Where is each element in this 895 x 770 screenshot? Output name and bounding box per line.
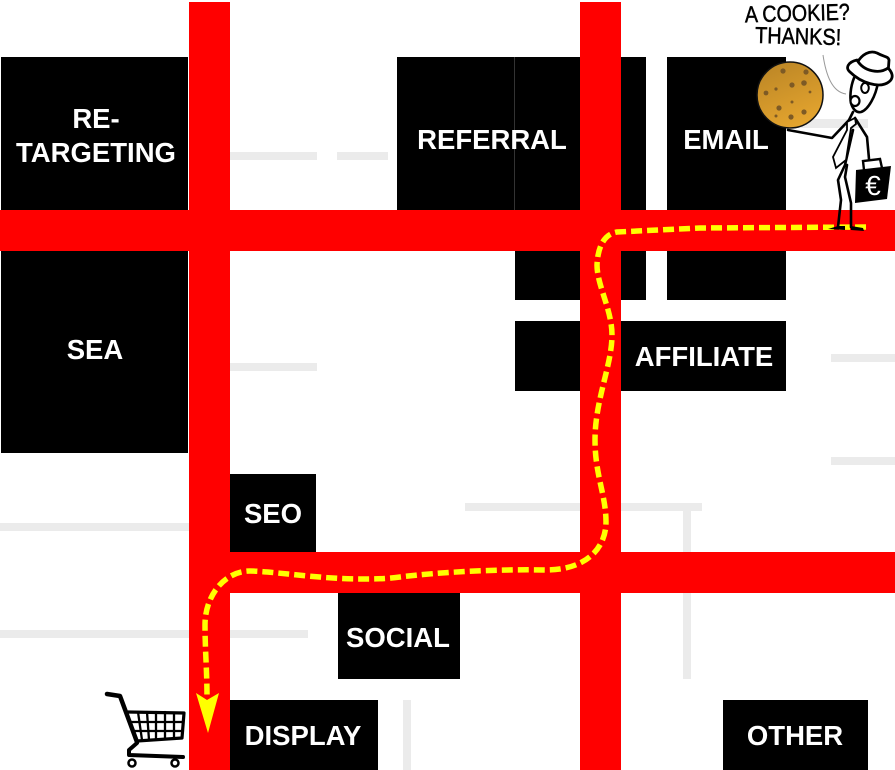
speech text: A COOKIE? THANKS!: THANKS! <box>755 22 842 50</box>
speech text: A COOKIE? THANKS! <box>744 0 850 50</box>
yellow arrowhead <box>196 693 219 733</box>
block: REFERRAL: REFERRAL <box>417 124 567 155</box>
speech pointer line <box>823 55 846 94</box>
block: SOCIAL: SOCIAL <box>346 622 450 653</box>
block: REFERRAL <box>397 57 646 300</box>
block: EMAIL <box>667 57 786 300</box>
block: OTHER: OTHER <box>747 720 843 751</box>
block: SEO: SEO <box>244 498 302 529</box>
block: DISPLAY <box>230 700 378 770</box>
block: SEA: SEA <box>67 334 123 365</box>
stick figure with hat and euro bag: € <box>865 170 881 201</box>
block: DISPLAY: DISPLAY <box>245 720 361 751</box>
stick figure with hat and euro bag <box>788 52 892 231</box>
block: OTHER <box>723 700 868 770</box>
icon: cookie <box>757 62 823 128</box>
block: RE-TARGETING: TARGETING <box>16 137 176 168</box>
block: SEA <box>1 251 188 453</box>
block: EMAIL: EMAIL <box>683 124 769 155</box>
block: AFFILIATE <box>515 321 786 391</box>
block: RE-TARGETING: RE- <box>72 103 120 134</box>
block: SEO <box>230 474 316 552</box>
block: RE-TARGETING <box>1 57 188 210</box>
customer journey dashed path <box>205 227 866 697</box>
block: SOCIAL <box>338 593 460 679</box>
icon: shopping cart <box>107 694 184 766</box>
block: AFFILIATE: AFFILIATE <box>635 341 773 372</box>
